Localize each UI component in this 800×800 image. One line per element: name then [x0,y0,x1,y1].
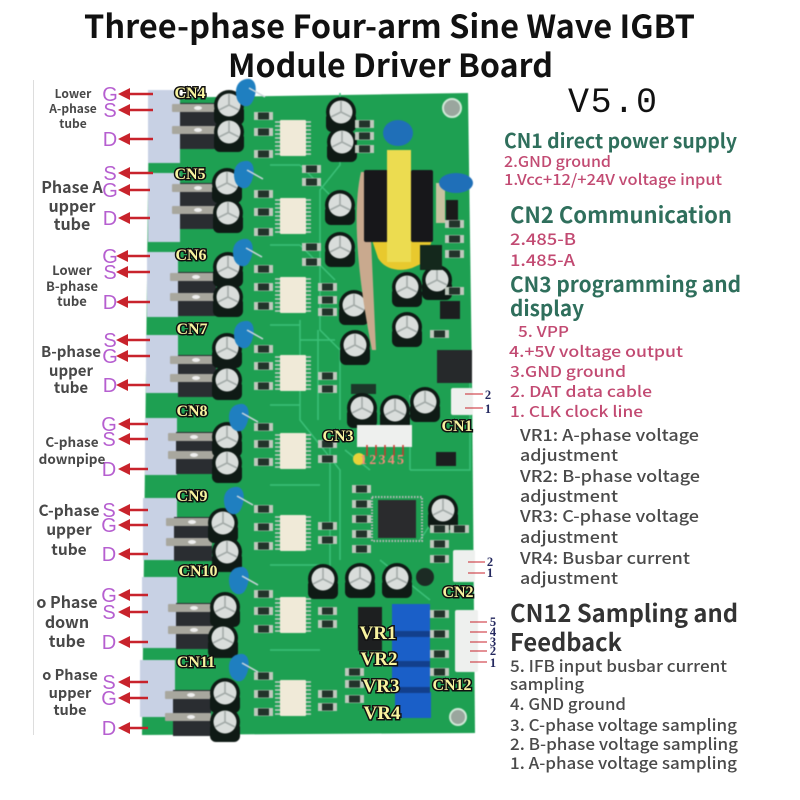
connector name labels: CN4 [174,85,206,102]
connector name labels: VR1 [360,623,396,644]
label: C-phase upper tube: upper [46,518,92,540]
mounting holes [443,99,466,725]
label: Lower B-phase tube: B-phase [46,276,98,295]
text block: CN12: sampling [510,671,584,695]
CN1 connector [451,388,473,415]
connector name labels: CN9 [176,488,208,505]
transformer [357,150,458,350]
G S D letters: S [102,500,116,522]
connector name labels: VR4 [364,703,401,724]
label: o Phase down tube: tube [49,628,85,652]
version label: V5.0 [568,83,657,123]
text block: VR adjustments: adjustment [520,483,619,507]
G S D letters: G [101,515,117,537]
G S D letters: D [102,459,116,481]
panel: driver board photo [140,79,478,742]
G S D letters: S [102,672,116,694]
label: B-phase upper tube [41,341,101,398]
channel: CN4 [148,79,321,186]
power section capacitors [325,97,452,365]
label: B-phase upper tube: B-phase [41,341,101,362]
CN3 connector [357,425,412,456]
label: Lower A-phase tube: Lower [55,85,92,102]
G S D letters: S [103,262,117,284]
channel: CN7 [146,321,337,400]
label: Lower A-phase tube: A-phase [48,100,97,117]
label: Phase A upper tube: tube [54,211,90,235]
connector pin numbers [485,388,497,670]
G S D letters: S [102,602,116,624]
left tube labels [36,85,105,720]
G S D letters: G [102,84,118,106]
label: C-phase downpipe: downpipe [39,448,105,468]
label: B-phase upper tube: upper [49,360,94,381]
label: Phase A upper tube [41,174,103,235]
text block: VR adjustments: adjustment [520,565,619,589]
G S D letters: D [102,544,116,566]
G S D letters: S [102,429,116,451]
G S D letters: G [101,414,117,436]
text block: CN1: 1.Vcc+12/+24V voltage input [504,169,722,190]
label: o Phase upper tube [42,664,98,720]
connector pin numbers: 1 [487,566,493,580]
text block: VR adjustments: adjustment [520,442,619,466]
label: C-phase upper tube: tube [51,538,87,560]
connector name labels: CN12 [432,677,472,694]
text block: CN3: 4.+5V voltage output [509,341,683,362]
text block: CN3: CN3 programming and [510,269,741,299]
text block: VR adjustments: VR1: A-phase voltage [519,422,699,446]
LED [353,453,365,465]
label: Lower B-phase tube [46,260,98,310]
connector pin numbers: 1 [490,656,496,670]
connector name labels: CN10 [178,563,218,580]
connector name labels: VR2 [361,649,397,670]
channel: CN5 [148,161,321,266]
connector pin numbers: 2 [487,555,493,569]
G S D letters: G [102,246,118,268]
text block: CN12: 4. GND ground [510,691,626,715]
connector name labels: CN2 [442,584,474,601]
text block: CN12: Feedback [510,623,622,658]
G S D letters: D [103,129,117,151]
text block: CN12: 1. A-phase voltage sampling [510,750,737,774]
label: Phase A upper tube: Phase A [41,174,103,198]
text block: CN1 [504,125,737,190]
G S D letters: D [103,208,117,230]
text block: VR adjustments [519,422,700,589]
label: o Phase upper tube: upper [49,682,92,703]
connector name labels [174,85,474,724]
G S D letters: S [103,100,117,122]
label: B-phase upper tube: tube [54,377,88,398]
channel: CN6 [147,239,337,317]
connector name labels: CN6 [175,247,207,264]
channel: CN8 [145,404,337,483]
text block: CN2 [510,198,732,271]
small capacitors lower section [308,387,458,599]
label: C-phase upper tube [38,499,100,560]
connector pin numbers: 2 [485,388,491,402]
CN12 connector [455,610,478,672]
text block: CN3: 5. VPP [518,321,569,342]
ICs and small parts [351,301,472,651]
copper traces [270,93,470,650]
connector name labels: CN7 [176,321,208,338]
label: C-phase downpipe [39,431,105,468]
connector pin numbers: 2 [490,644,496,658]
small SMD parts [345,120,469,703]
G S D letters [101,84,118,740]
red arrows [116,88,487,734]
connector pin numbers: 5 [490,615,496,629]
text block: CN12 [510,594,738,774]
left margin line [33,80,34,735]
label: Lower B-phase tube: Lower [52,260,92,279]
G S D letters: D [103,292,117,314]
title: Three-phase Four-arm Sine Wave IGBT [84,2,695,48]
connector pin numbers: 1 [485,402,491,416]
CN2 connector [453,550,475,582]
text block: CN2: CN2 Communication [510,198,732,230]
channel: CN11 [140,654,337,742]
text block: VR adjustments: VR3: C-phase voltage [519,503,699,527]
G S D letters: G [101,688,117,710]
text block: CN3 [509,269,741,422]
label: o Phase down tube: down [45,609,89,633]
text block: CN1: 2.GND ground [504,151,611,172]
text block: CN1: CN1 direct power supply [504,125,737,154]
connector name labels: CN5 [174,166,206,183]
G S D letters: D [103,375,117,397]
CN3 pin numbers: 12345 [360,453,404,468]
board substrate [142,93,475,735]
label: C-phase upper tube: C-phase [38,499,100,521]
connector name labels: VR3 [363,676,399,697]
connector pin numbers: 4 [490,625,497,639]
label: Lower A-phase tube [48,85,97,132]
text block: CN12: CN12 Sampling and [510,594,738,629]
channel: CN10 [142,567,337,658]
label: C-phase downpipe: C-phase [45,431,99,451]
text block: CN3: 2. DAT data cable [510,381,652,402]
label: o Phase upper tube: o Phase [42,664,98,685]
text block: CN12: 2. B-phase voltage sampling [510,731,738,755]
connector pin numbers: 3 [490,635,496,649]
text block: CN3: 3.GND ground [510,361,626,382]
channel: CN9 [143,487,337,572]
pin labels and red arrows [101,84,497,740]
G S D letters: G [102,346,118,368]
label: Lower A-phase tube: tube [59,115,87,132]
text block: CN3: 1. CLK clock line [510,401,643,422]
text block: CN2: 2.485-B [510,226,576,250]
G S D letters: G [101,585,117,607]
connector name labels: CN3 [322,428,354,445]
label: Phase A upper tube: upper [48,193,96,217]
title [84,2,695,87]
text block: VR adjustments: VR4: Busbar current [519,545,691,569]
text block: CN2: 1.485-A [510,247,575,271]
text block: VR adjustments: VR2: B-phase voltage [519,463,700,487]
label: o Phase down tube: o Phase [36,589,98,613]
blue trimmers [392,604,431,718]
label: o Phase upper tube: tube [53,699,87,720]
label: Lower B-phase tube: tube [57,291,87,310]
label: o Phase down tube [36,589,98,652]
text block: CN12: 3. C-phase voltage sampling [510,712,737,736]
blue film capacitors [383,120,473,193]
connector name labels: CN1 [441,418,473,435]
G S D letters: S [103,330,117,352]
text block: CN3: display [510,293,584,323]
G S D letters: S [103,163,117,185]
connector name labels: CN11 [177,654,215,671]
title: Module Driver Board [228,41,553,87]
G S D letters: D [102,632,116,654]
text block: CN12: 5. IFB input busbar current [510,653,728,677]
G S D letters: G [102,180,118,202]
text block: VR adjustments: adjustment [520,524,619,548]
G S D letters: D [102,718,116,740]
connector name labels: CN8 [176,403,208,420]
